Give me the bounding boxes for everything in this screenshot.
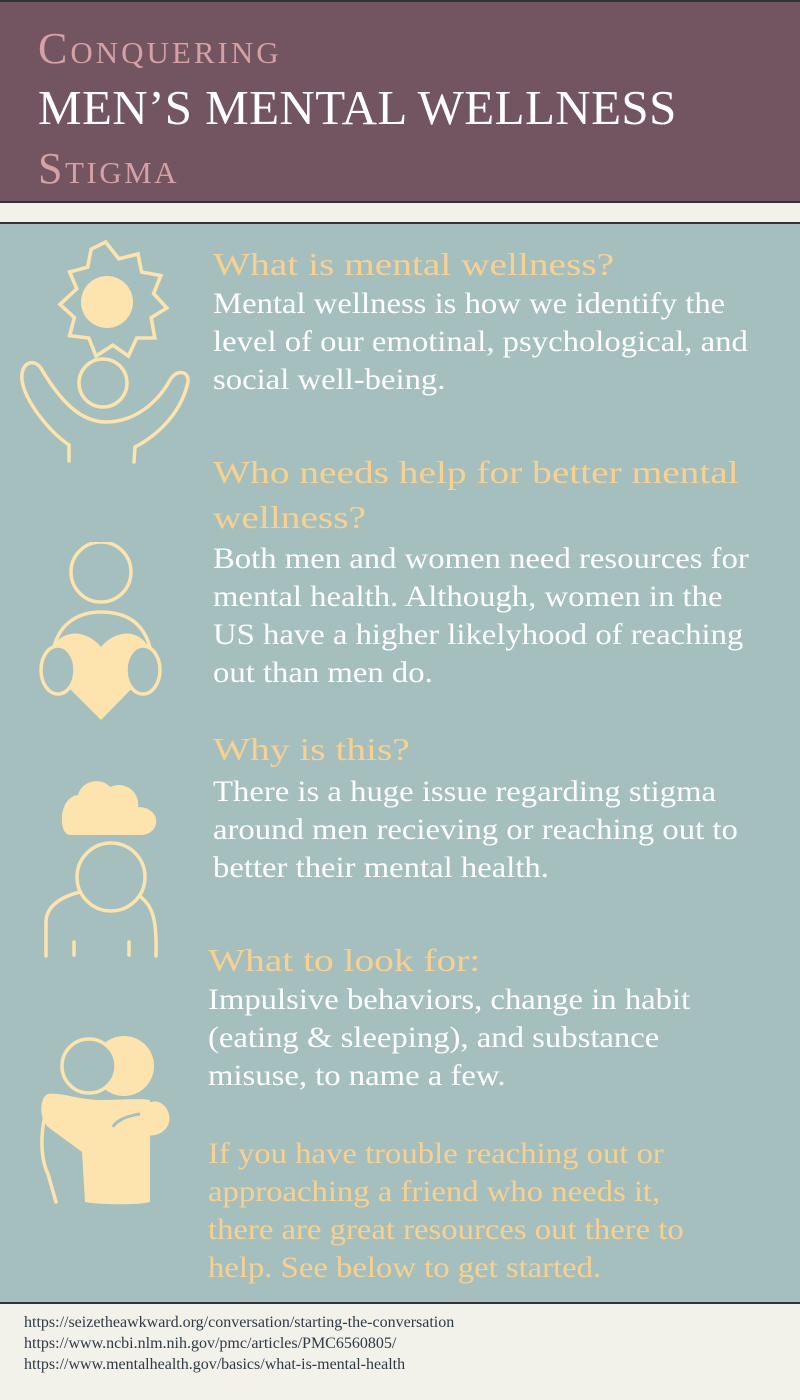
footer sources: https://www.ncbi.nlm.nih.gov/pmc/articles/PMC6560805/ [24,1335,396,1352]
section 3 body: There is a huge issue regarding stigma [213,775,716,808]
callout: resources [208,1137,684,1284]
icon: person with cloud [44,781,158,958]
icon: sun person [20,240,190,464]
section 1 body: Mental wellness is how we identify the [213,287,725,320]
title line 1: Conquering [38,24,282,73]
main panel [0,222,800,1304]
footer sources: https://www.mentalhealth.gov/basics/what-is-mental-health [24,1356,405,1373]
section 2 body: Both men and women need resources for [213,542,749,575]
section 4 heading: What to look for: [208,942,480,978]
section 2 heading: Who needs help for better mental [213,454,739,490]
title line 3: Stigma [38,144,179,193]
section 1 body: level of our emotinal, psychological, and [213,325,748,358]
section 3 body: better their mental health. [213,851,549,884]
section 2 heading [213,454,739,535]
footer sources [24,1314,454,1373]
section 2 body: out than men do. [213,656,433,689]
section 1 heading: What is mental wellness? [213,246,614,282]
callout: resources: If you have trouble reaching out or [208,1137,664,1170]
section 2 heading: wellness? [213,499,366,535]
callout: resources: help. See below to get started. [208,1251,601,1284]
section 4 body: Impulsive behaviors, change in habit [208,983,690,1016]
title line 2: MEN’S MENTAL WELLNESS [38,80,677,135]
header [0,0,800,203]
section 4 body: misuse, to name a few. [208,1059,506,1092]
section 1 body [213,287,748,396]
section 3 body: around men recieving or reaching out to [213,813,738,846]
callout: resources: approaching a friend who needs it, [208,1175,660,1208]
section 3 body [213,775,738,884]
section 2 body: mental health. Although, women in the [213,580,722,613]
section 4 body [208,983,690,1092]
callout: resources: there are great resources out there to [208,1213,684,1246]
section 1 body: social well-being. [213,363,445,396]
section 4 body: (eating & sleeping), and substance [208,1021,659,1054]
footer sources: https://seizetheawkward.org/conversation/starting-the-conversation [24,1314,454,1331]
section 2 body: US have a higher likelyhood of reaching [213,618,743,651]
icon: hug [40,1036,170,1204]
section 2 body [213,542,749,689]
icon: person with heart [39,542,162,720]
section 3 heading: Why is this? [213,731,410,767]
